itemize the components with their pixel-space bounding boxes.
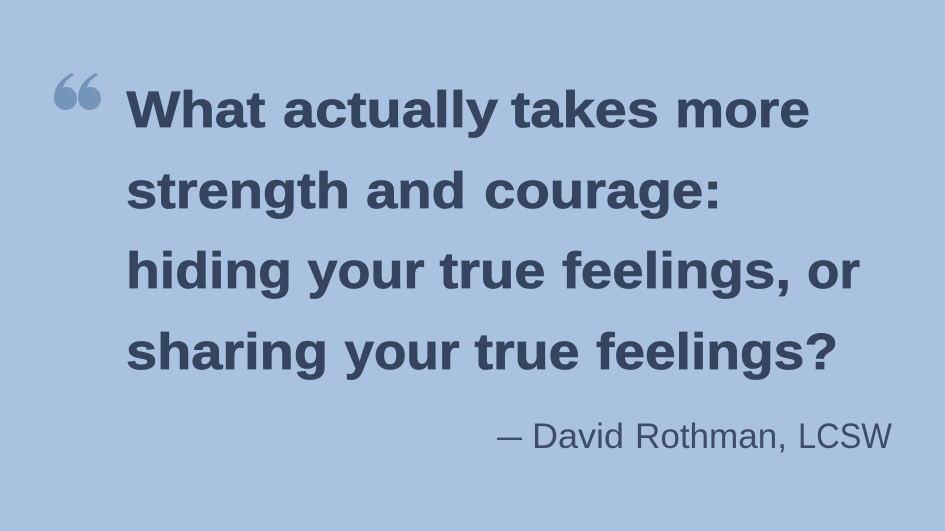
quote line 4: feelings? [596, 323, 838, 380]
quote line 4: sharing [126, 323, 328, 380]
icon: quotation mark [54, 73, 101, 110]
quote line 1: What [126, 81, 266, 138]
attribution: Rothman, [635, 417, 787, 456]
quote line 3: your [308, 242, 425, 299]
attribution: David [532, 417, 624, 456]
attribution: — [497, 417, 522, 456]
quote line 3: feelings, [562, 242, 791, 299]
quote line 3: or [807, 242, 860, 299]
quote line 2: and [366, 162, 466, 219]
quote line 1: actually [283, 81, 499, 138]
quote line 4: true [474, 323, 580, 380]
quote line 3: hiding [126, 242, 292, 299]
quote line 2: courage: [484, 162, 722, 219]
quote line 1: more [675, 81, 810, 138]
quote line 3: true [440, 242, 546, 299]
attribution: LCSW [798, 417, 892, 456]
quote line 1: takes [511, 81, 659, 138]
quote text [126, 81, 860, 380]
quote line 4: your [344, 323, 460, 380]
quote line 2: strength [126, 162, 350, 219]
